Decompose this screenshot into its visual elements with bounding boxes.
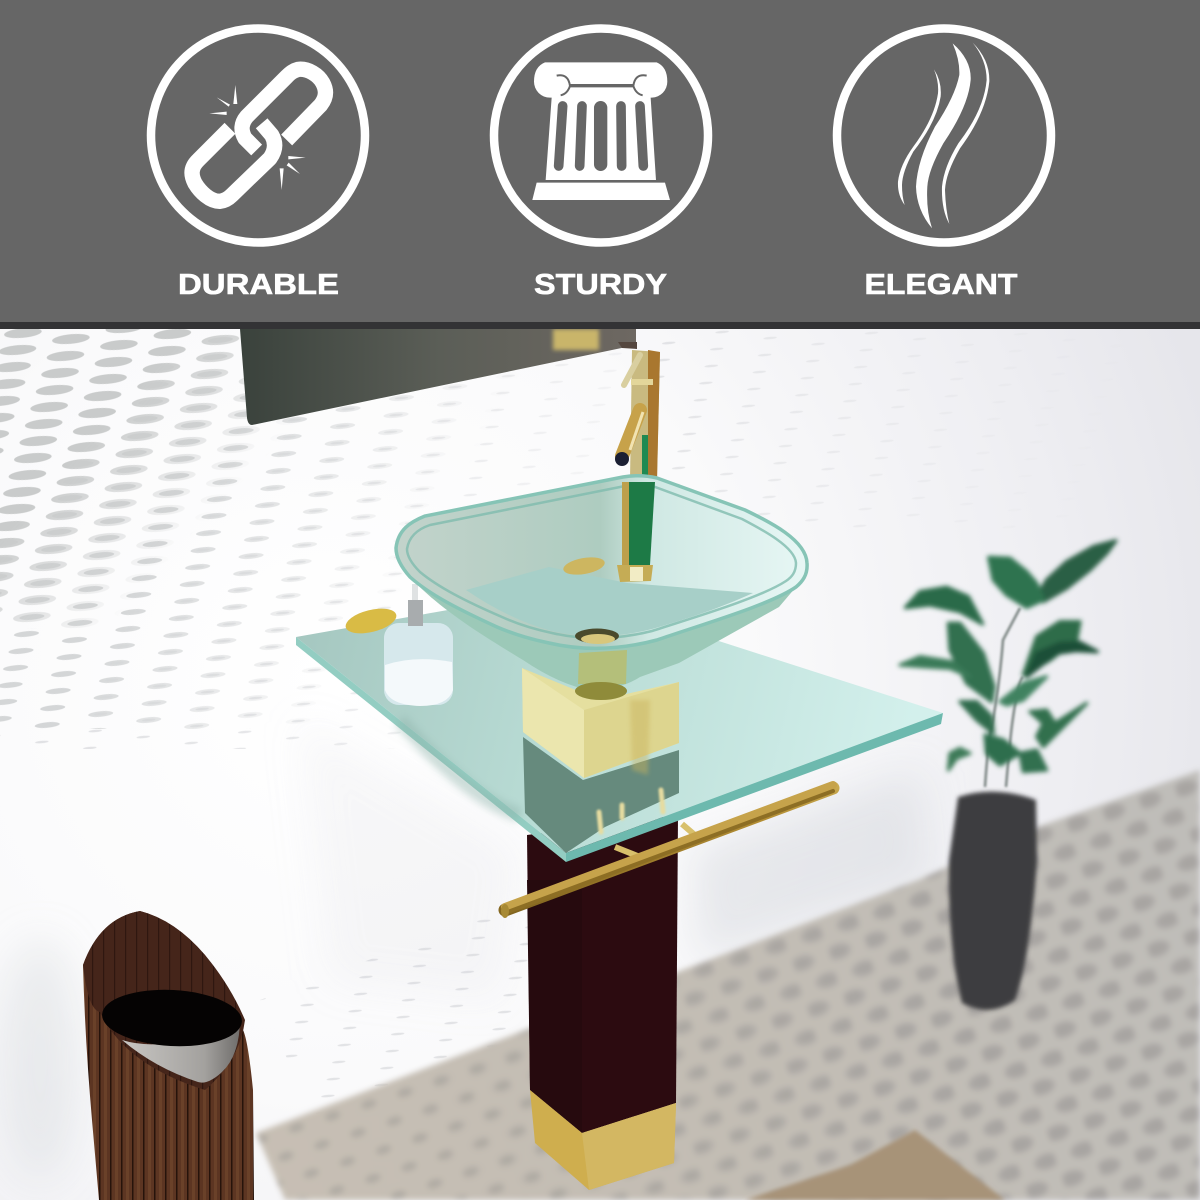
gold cube support	[522, 668, 679, 778]
faucet base inside the bowl	[622, 482, 655, 565]
wall shadows	[0, 720, 930, 1180]
plant vase	[949, 792, 1037, 1010]
banner bottom stripe	[0, 322, 1200, 329]
plant leaves	[900, 541, 1116, 772]
bowl floor	[466, 567, 753, 636]
feature: sturdy	[494, 28, 708, 301]
bowl drain	[575, 628, 619, 644]
umbrella stand	[83, 911, 254, 1200]
wall mirror	[240, 329, 636, 425]
plant stems	[985, 608, 1023, 787]
faucet	[615, 342, 660, 480]
icon: broken chain link	[151, 28, 365, 242]
product photo scene	[0, 329, 1200, 1200]
label: durable: DURABLE	[178, 269, 339, 301]
bowl pop-up stopper	[562, 554, 606, 578]
label: sturdy: STURDY	[534, 269, 667, 301]
label: elegant: ELEGANT	[864, 269, 1018, 301]
icon: flowing waves	[837, 28, 1051, 242]
icon: greek column	[494, 28, 708, 242]
glass counter shelf	[296, 590, 943, 862]
faucet handle	[624, 355, 640, 385]
feature: elegant	[837, 28, 1051, 301]
gold base	[530, 1090, 676, 1190]
feature banner	[0, 0, 1200, 329]
floor	[256, 770, 1200, 1200]
wall	[0, 329, 1200, 1200]
feature: durable	[151, 28, 365, 301]
towel bar	[501, 785, 833, 918]
gold drain cap on counter	[343, 604, 399, 638]
halftone dots on wall	[0, 329, 904, 1098]
potted plant	[900, 541, 1116, 1010]
bowl underside	[410, 577, 796, 690]
rug	[745, 1130, 1005, 1200]
glass vessel bowl	[396, 476, 807, 700]
pedestal column	[527, 815, 678, 1190]
banner background	[0, 0, 1200, 322]
faucet spout	[622, 410, 640, 456]
bowl rim and interior	[396, 476, 807, 648]
soap dispenser	[384, 584, 453, 706]
